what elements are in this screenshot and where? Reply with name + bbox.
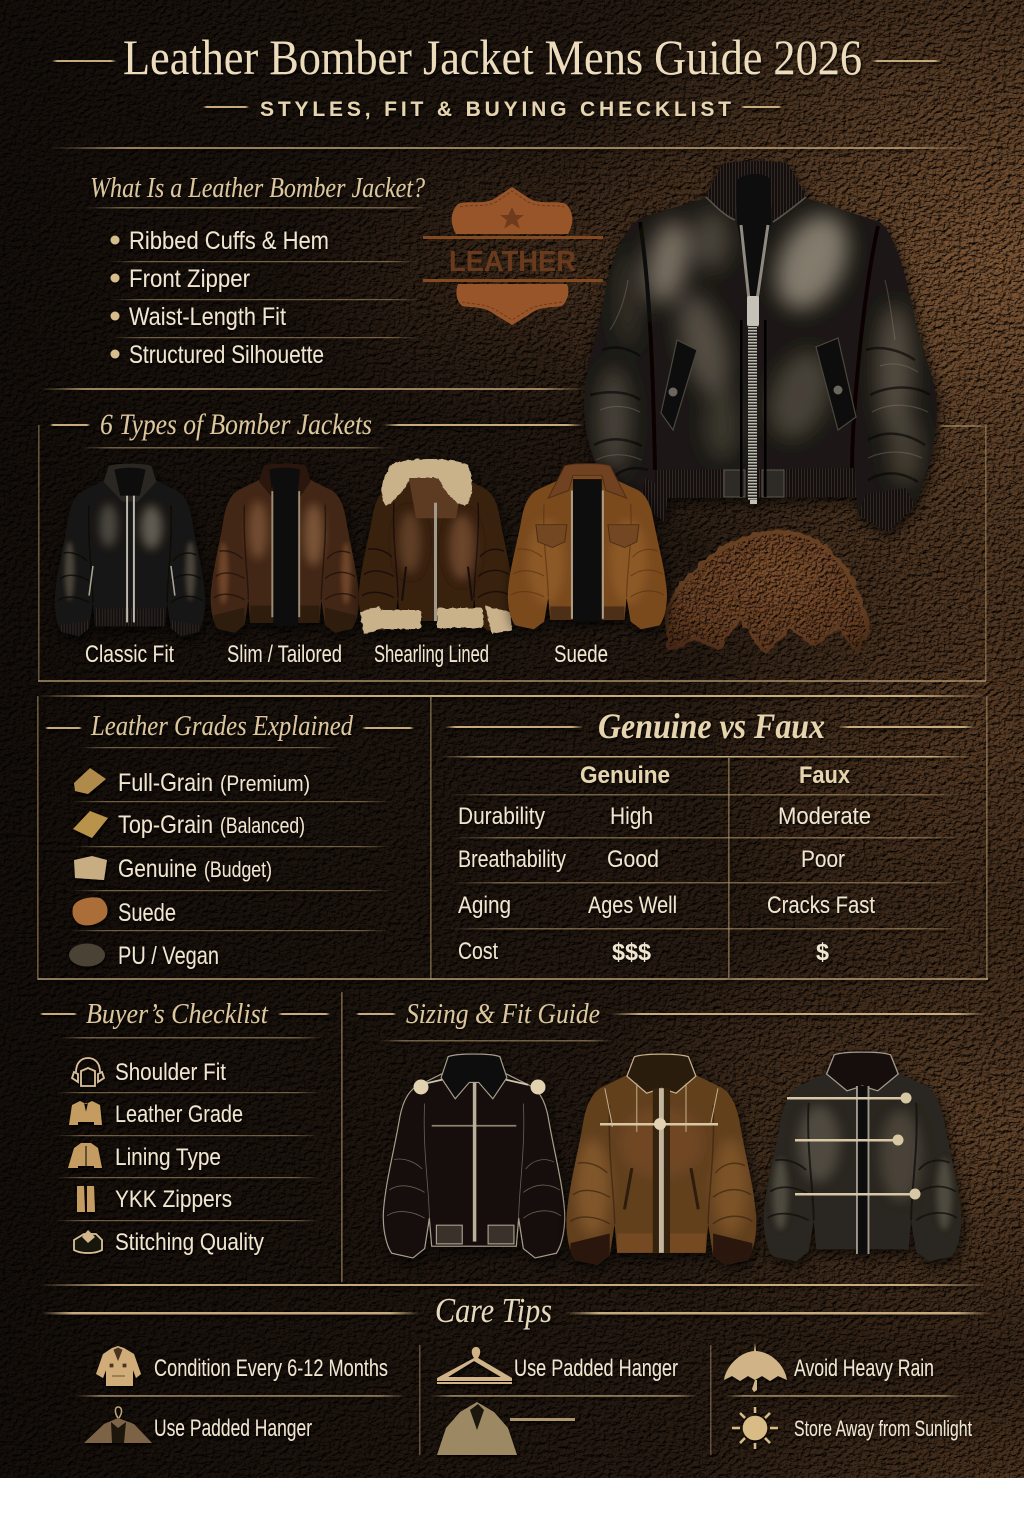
- feature list: Structured Silhouette: [129, 341, 324, 369]
- panel: genuine vs faux table: [440, 706, 975, 978]
- subtitle: STYLES, FIT & BUYING CHECKLIST: [260, 98, 731, 121]
- heading: genuine vs faux: Genuine vs Faux: [598, 706, 825, 746]
- checklist labels: Shoulder Fit: [115, 1059, 226, 1086]
- leather badge: [423, 187, 603, 325]
- row: aging: Aging: [458, 892, 511, 919]
- icon: genuine: [74, 856, 107, 880]
- shearling collar and trims: [360, 459, 512, 634]
- row: breathability: [458, 846, 845, 873]
- row: cost: $: [816, 939, 830, 966]
- sizing jacket: shoulders: [383, 1054, 565, 1258]
- table headers: [580, 762, 851, 789]
- heading: what is: What Is a Leather Bomber Jacket?: [90, 173, 425, 204]
- feature list: Ribbed Cuffs & Hem: [129, 227, 329, 255]
- icon: stitching quality: [74, 1230, 102, 1253]
- tip: rain: Avoid Heavy Rain: [794, 1355, 934, 1382]
- jacket type labels: Slim / Tailored: [227, 641, 342, 668]
- heading: checklist: Buyer’s Checklist: [86, 998, 269, 1030]
- icon: hanger: [437, 1347, 512, 1384]
- heading: grades: Leather Grades Explained: [90, 711, 354, 742]
- icon: umbrella: [724, 1343, 787, 1392]
- badge word: LEATHER: [449, 246, 576, 278]
- section rules for types: [38, 388, 987, 682]
- heading: sizing and fit: Sizing & Fit Guide: [406, 998, 600, 1030]
- grade labels: (Budget): [204, 857, 272, 882]
- markers: length: [787, 1092, 920, 1200]
- panel: buyers checklist: [40, 992, 343, 1282]
- feature list: Waist-Length Fit: [129, 303, 286, 331]
- grade labels: Suede: [118, 899, 176, 927]
- grade labels: Full-Grain: [118, 769, 213, 797]
- markers: shoulder: [414, 1080, 546, 1094]
- jacket type labels: Suede: [554, 641, 608, 668]
- sizing jacket: length: [764, 1052, 961, 1261]
- icon: pu vegan: [69, 944, 105, 966]
- hem and cuffs: [655, 468, 856, 498]
- tip: condition: Condition Every 6-12 Months: [154, 1355, 388, 1382]
- feature list: [110, 227, 329, 369]
- row: breathability: Breathability: [458, 846, 566, 873]
- pockets: [661, 340, 697, 430]
- marker: chest: [600, 1118, 718, 1130]
- jacket: slim tailored: [211, 464, 359, 637]
- checklist labels: Leather Grade: [115, 1101, 243, 1128]
- panel: what is a leather bomber jacket: [85, 173, 430, 369]
- grade labels: (Premium): [220, 771, 310, 796]
- grade labels: Top-Grain: [118, 811, 213, 839]
- grade labels: Genuine: [118, 855, 197, 883]
- collar: [706, 161, 806, 221]
- row: aging: [458, 892, 875, 919]
- row: cost: Cost: [458, 938, 498, 965]
- tip: padded hanger: Use Padded Hanger: [514, 1355, 678, 1382]
- row: aging: Cracks Fast: [767, 892, 875, 919]
- jacket type labels: Classic Fit: [85, 641, 174, 668]
- icon: jacket and dashes: [437, 1402, 575, 1455]
- panel: care tips: [38, 1284, 990, 1455]
- heading: 6 types: 6 Types of Bomber Jackets: [100, 408, 372, 441]
- zipper: [741, 225, 768, 325]
- grade labels: [118, 769, 310, 970]
- icon: jacket on hanger: [84, 1407, 152, 1443]
- row: durability: High: [610, 803, 653, 830]
- row: durability: [458, 803, 871, 830]
- checklist labels: YKK Zippers: [115, 1186, 232, 1213]
- row: cost: $$$: [612, 939, 652, 966]
- row: cost: [458, 938, 830, 966]
- icon: shoulder fit: [72, 1058, 104, 1086]
- sizing jacket: chest: [566, 1054, 756, 1270]
- table headers: Genuine: [580, 762, 670, 789]
- row: breathability: Poor: [801, 846, 845, 873]
- grade labels: (Balanced): [220, 813, 305, 838]
- grade labels: PU / Vegan: [118, 942, 219, 970]
- heading: care tips: Care Tips: [435, 1291, 552, 1330]
- row: aging: Ages Well: [588, 892, 677, 919]
- row: durability: Durability: [458, 803, 545, 830]
- icon: suede: [73, 897, 107, 925]
- title: Leather Bomber Jacket Mens Guide 2026: [123, 29, 862, 85]
- icon: full grain: [74, 768, 106, 794]
- icon: ykk zippers: [77, 1186, 95, 1212]
- feature list: Front Zipper: [129, 265, 250, 293]
- table headers: Faux: [799, 762, 851, 789]
- jacket: suede: [508, 464, 667, 629]
- checklist labels: Lining Type: [115, 1144, 221, 1171]
- jacket type labels: Shearling Lined: [374, 641, 489, 668]
- leather swatch: [664, 530, 870, 655]
- row: durability: Moderate: [778, 803, 871, 830]
- checklist labels: [115, 1059, 264, 1256]
- title block: [50, 29, 980, 149]
- icon: lining type: [68, 1143, 102, 1168]
- jacket: classic fit: [55, 464, 205, 640]
- icon: top grain: [73, 811, 108, 838]
- checklist labels: Stitching Quality: [115, 1229, 264, 1256]
- main hero jacket: [584, 161, 937, 532]
- tip: padded hanger 2: Use Padded Hanger: [154, 1415, 312, 1442]
- row: breathability: Good: [607, 846, 659, 873]
- jacket type labels: [85, 641, 608, 668]
- icon: coat: [96, 1346, 141, 1386]
- panel: leather grades: [37, 695, 988, 980]
- icon: leather grade: [69, 1101, 102, 1125]
- jacket: shearling lined: [359, 459, 513, 634]
- icon: sun: [732, 1407, 778, 1449]
